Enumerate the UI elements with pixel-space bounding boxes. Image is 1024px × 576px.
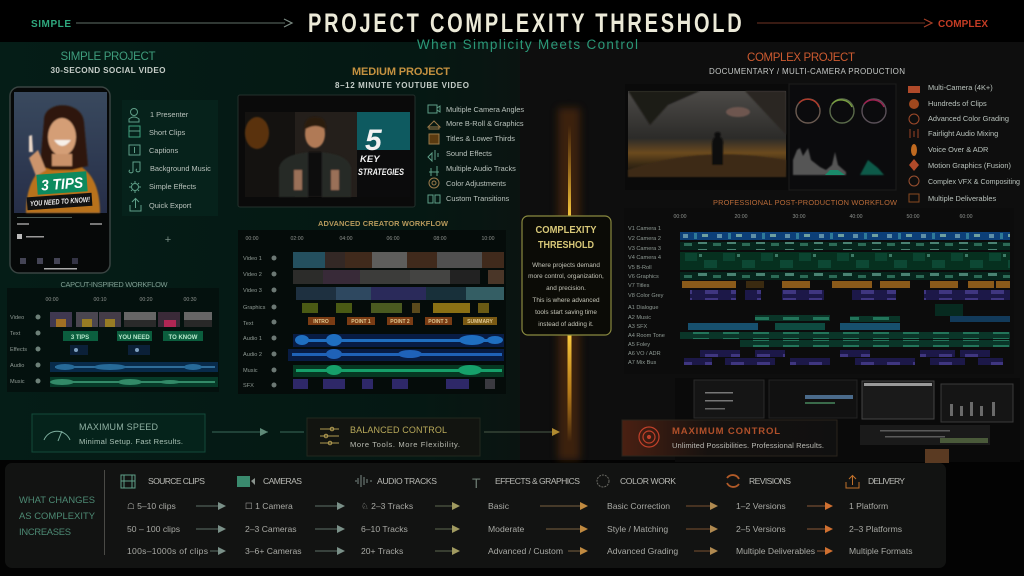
track: text clips: POINT 1: [351, 319, 371, 325]
phone mockup: [10, 87, 110, 273]
timeline: advanced creator workflow: 08:00: [434, 236, 447, 242]
timeline: capcut workflow: Audio: [10, 363, 24, 369]
feature list: complex: Complex VFX & Compositing: [928, 177, 1020, 186]
text clips: [63, 331, 203, 341]
callout: balanced control: BALANCED CONTROL: [350, 425, 447, 435]
track: music: [293, 365, 504, 377]
callout: complexity threshold: COMPLEXITY: [536, 225, 597, 236]
callout: complexity threshold: instead of adding it.: [538, 321, 594, 328]
timeline: post-production workflow: 50:00: [907, 214, 920, 220]
timeline: advanced creator workflow: 02:00: [291, 236, 304, 242]
timeline: post-production workflow: [624, 208, 1014, 374]
column: color work: Style / Matching: [607, 524, 668, 534]
arrow: speed to balanced: [212, 428, 304, 436]
track: text clips: POINT 2: [390, 319, 410, 325]
callout: complexity threshold: more control, organization,: [528, 273, 604, 280]
column: effects and graphics: Basic: [488, 501, 510, 511]
feature list: complex: Motion Graphics (Fusion): [928, 161, 1011, 170]
feature list: simple: Short Clips: [149, 128, 185, 137]
table row heading: WHAT CHANGES: [19, 494, 95, 505]
threshold beam: [558, 108, 580, 460]
timeline: capcut workflow: Text: [10, 331, 21, 337]
feature list: simple: 1 Presenter: [150, 110, 189, 119]
video title: 5 key strategies: STRATEGIES: [358, 167, 405, 178]
track: text clips: [308, 317, 497, 325]
video thumbnails: [50, 312, 212, 327]
timeline: capcut workflow: 00:00: [46, 297, 59, 303]
icon: effects: [129, 181, 141, 193]
icon: sliders: [320, 427, 339, 445]
track: text clips: INTRO: [313, 319, 329, 325]
timeline: post-production workflow: V7 Titles: [628, 283, 650, 289]
icon: captions: [129, 145, 140, 155]
feature list: simple: Background Music: [150, 164, 211, 173]
gauge: red wheel: [796, 99, 820, 123]
column: effects and graphics: Moderate: [488, 524, 525, 534]
column: revisions: Multiple Deliverables: [736, 546, 815, 556]
table row heading: INCREASES: [19, 526, 71, 537]
timeline: post-production workflow: V5 B-Roll: [628, 265, 652, 271]
feature list: simple: Simple Effects: [149, 182, 196, 191]
callout: complexity threshold: [522, 216, 611, 335]
icon: presenter: [129, 108, 139, 122]
column: delivery: Multiple Formats: [849, 546, 913, 556]
track: graphics: [302, 303, 489, 313]
color grading viewer: [625, 84, 789, 190]
timeline: post-production workflow: 20:00: [735, 214, 748, 220]
audio tracks: [680, 304, 1010, 365]
icon: export: [130, 198, 141, 211]
timeline: advanced creator workflow: Graphics: [243, 305, 266, 311]
timeline: post-production workflow: A6 VO / ADR: [628, 351, 661, 357]
column: cameras: [237, 476, 345, 556]
timeline: advanced creator workflow: Video 3: [243, 288, 262, 294]
timeline: advanced creator workflow: SFX: [243, 383, 254, 389]
icon: short clips: [129, 126, 140, 137]
track: video 1: [293, 252, 504, 268]
column: color work: Advanced Grading: [607, 546, 678, 556]
column: cameras: 3–6+ Cameras: [245, 546, 302, 556]
feature list: complex: Advanced Color Grading: [928, 114, 1009, 123]
video subtitle: YOU NEED TO KNOW!: [30, 195, 91, 208]
feature list: medium: Multiple Camera Angles: [446, 105, 524, 114]
column: source clips: 50 – 100 clips: [127, 524, 180, 534]
video tracks: [680, 232, 1010, 300]
arrow: balanced to maximum: [484, 428, 560, 436]
column: color work: COLOR WORK: [620, 476, 676, 486]
timeline: advanced creator workflow: Audio 1: [243, 336, 262, 342]
track: video 2: [293, 270, 504, 284]
heading: complex project: DOCUMENTARY / MULTI-CAMERA PRODUCTION: [709, 67, 905, 76]
callout: maximum control: [622, 420, 837, 456]
column: source clips: 100s–1000s of clips: [127, 546, 208, 556]
column: revisions: [727, 475, 833, 556]
timeline: post-production workflow: 30:00: [793, 214, 806, 220]
track: sfx: [293, 379, 495, 389]
feature list: medium: Multiple Audio Tracks: [446, 164, 516, 173]
table row heading: [19, 494, 96, 537]
column: cameras: 2–3 Cameras: [245, 524, 297, 534]
title: PROJECT COMPLEXITY THRESHOLD: [308, 8, 742, 39]
panel: simple project: [7, 51, 219, 392]
icon: music: [129, 162, 140, 173]
table row heading: AS COMPLEXITY: [19, 510, 96, 521]
scale label: simple: SIMPLE: [31, 19, 71, 30]
column: cameras: ☐ 1 Camera: [245, 501, 293, 511]
timeline: advanced creator workflow: Video 2: [243, 272, 262, 278]
feature list: medium: Titles & Lower Thirds: [446, 134, 515, 143]
timeline: advanced creator workflow: 04:00: [340, 236, 353, 242]
column: effects and graphics: T: [472, 475, 481, 491]
timeline: post-production workflow: A1 Dialogue: [628, 305, 658, 311]
column: effects and graphics: EFFECTS & GRAPHICS: [495, 476, 580, 486]
feature list: medium: Sound Effects: [446, 149, 492, 158]
heading: simple project: 30-SECOND SOCIAL VIDEO: [50, 66, 166, 75]
subtitle: When Simplicity Meets Control: [417, 37, 638, 52]
track: audio 2: [288, 349, 504, 361]
feature list: medium: Custom Transitions: [446, 194, 510, 203]
panel: medium project: [238, 66, 524, 394]
video title: 5 key strategies: KEY: [360, 154, 381, 165]
track: text clips: POINT 3: [428, 319, 448, 325]
panel: complex project: [624, 52, 1020, 463]
timeline: capcut workflow: 00:30: [184, 297, 197, 303]
timeline: advanced creator workflow: 10:00: [482, 236, 495, 242]
feature list: simple: Captions: [149, 146, 178, 155]
timeline: capcut workflow: Video: [10, 315, 24, 321]
scale label: complex: COMPLEX: [938, 19, 988, 30]
timeline: post-production workflow: V4 Camera 4: [628, 255, 661, 261]
timeline: advanced creator workflow: 00:00: [246, 236, 259, 242]
feature list: simple: [122, 100, 218, 216]
timeline: advanced creator workflow: Text: [243, 321, 254, 327]
callout: complexity threshold: tools start saving time: [535, 309, 597, 316]
callout: maximum speed: Minimal Setup. Fast Results.: [79, 437, 183, 446]
arrow: simple to title: [76, 19, 292, 27]
column: audio tracks: [355, 475, 460, 556]
feature list: complex: Multi-Camera (4K+): [928, 83, 993, 92]
timeline: advanced creator workflow: 06:00: [387, 236, 400, 242]
icon: speedometer: [44, 431, 70, 441]
timeline: capcut workflow: 00:20: [140, 297, 153, 303]
heading: simple project: [50, 51, 166, 75]
heading: medium project: [335, 66, 469, 90]
callout: maximum control: Unlimited Possibilities. Professional Results.: [672, 441, 824, 450]
panel: what changes table: [5, 463, 946, 568]
timeline: capcut workflow: Music: [10, 379, 25, 385]
icon: target: [639, 427, 659, 447]
track: audio 1: [293, 334, 504, 347]
text clips: YOU NEED: [118, 335, 150, 341]
feature list: medium: [428, 105, 524, 203]
effects markers: [70, 345, 150, 355]
feature list: complex: Fairlight Audio Mixing: [928, 129, 998, 138]
column: revisions: REVISIONS: [749, 476, 791, 486]
arrow: title to complex: [757, 19, 932, 27]
column: delivery: [846, 476, 913, 556]
edit suite monitors: [675, 378, 1020, 463]
column: delivery: 1 Platform: [849, 501, 888, 511]
heading: simple project: SIMPLE PROJECT: [60, 51, 156, 63]
column: revisions: 2–5 Versions: [736, 524, 786, 534]
workflow heading: post-production: PROFESSIONAL POST-PRODUCTION WORKFLOW: [713, 198, 897, 207]
timeline: post-production workflow: A3 SFX: [628, 324, 648, 330]
workflow heading: advanced creator: ADVANCED CREATOR WORKFLOW: [318, 219, 448, 228]
heading: complex project: COMPLEX PROJECT: [747, 52, 855, 64]
timeline: post-production workflow: A7 Mix Bus: [628, 360, 656, 366]
video title: 5 key strategies: 5: [365, 124, 383, 157]
timeline: post-production workflow: V1 Camera 1: [628, 226, 661, 232]
callout: balanced control: [307, 418, 480, 456]
video title: 3 tips: 3 TIPS: [41, 175, 84, 194]
audio track: [50, 362, 218, 372]
column: color work: [597, 475, 718, 556]
feature list: complex: [908, 83, 1020, 203]
callout: complexity threshold: and precision.: [546, 285, 586, 292]
callout: maximum speed: [32, 414, 205, 452]
timeline: post-production workflow: 60:00: [960, 214, 973, 220]
column: audio tracks: AUDIO TRACKS: [377, 476, 437, 486]
gauge: green wheel: [830, 99, 854, 123]
music track: [50, 377, 218, 387]
column: cameras: CAMERAS: [263, 476, 302, 486]
timeline: post-production workflow: V8 Color Grey: [628, 293, 664, 299]
column: source clips: SOURCE CLIPS: [148, 476, 205, 486]
column: audio tracks: ♘ 2–3 Tracks: [361, 501, 413, 511]
timeline: capcut workflow: Effects: [10, 347, 27, 353]
timeline: post-production workflow: 40:00: [850, 214, 863, 220]
text clips: TO KNOW: [169, 335, 198, 341]
gauge: magenta wheel: [862, 99, 886, 123]
video subtitle: [27, 193, 92, 210]
column: delivery: DELIVERY: [868, 476, 905, 486]
timeline: post-production workflow: A4 Room Tone: [628, 333, 665, 339]
timeline: post-production workflow: V6 Graphics: [628, 274, 659, 280]
feature list: medium: More B-Roll & Graphics: [446, 119, 524, 128]
column: audio tracks: 20+ Tracks: [361, 546, 403, 556]
column: source clips: ☖ 5–10 clips: [127, 501, 176, 511]
scopes panel: [789, 84, 896, 190]
column: color work: Basic Correction: [607, 501, 670, 511]
column: audio tracks: 6–10 Tracks: [361, 524, 408, 534]
timeline: post-production workflow: A2 Music: [628, 315, 651, 321]
track: text clips: SUMMARY: [467, 319, 493, 325]
column: effects and graphics: [472, 475, 588, 556]
callout: balanced control: More Tools. More Flexibility.: [350, 440, 460, 449]
callout: complexity threshold: THRESHOLD: [538, 240, 594, 251]
feature list: complex: Voice Over & ADR: [928, 145, 988, 154]
timeline: capcut workflow: 00:10: [94, 297, 107, 303]
column: source clips: [121, 475, 226, 556]
heading: medium project: MEDIUM PROJECT: [352, 66, 450, 78]
workflow heading: capcut: CAPCUT-INSPIRED WORKFLOW: [60, 280, 168, 289]
timeline: post-production workflow: 00:00: [674, 214, 687, 220]
timeline: advanced creator workflow: Video 1: [243, 256, 262, 262]
callout: maximum speed: MAXIMUM SPEED: [79, 422, 158, 432]
timeline: post-production workflow: V3 Camera 3: [628, 246, 661, 252]
feature list: simple: Quick Export: [149, 201, 191, 210]
column: delivery: 2–3 Platforms: [849, 524, 902, 534]
heading: medium project: 8–12 MINUTE YOUTUBE VIDEO: [335, 81, 469, 90]
feature list: complex: Multiple Deliverables: [928, 194, 996, 203]
timeline: advanced creator workflow: [238, 230, 506, 394]
column: effects and graphics: Advanced / Custom: [488, 546, 563, 556]
video title: 5 key strategies: [358, 124, 405, 178]
timeline: advanced creator workflow: Music: [243, 368, 258, 374]
text clips: 3 TIPS: [71, 335, 89, 341]
timeline: post-production workflow: V2 Camera 2: [628, 236, 661, 242]
track: video 3: [296, 287, 504, 300]
feature list: complex: Hundreds of Clips: [928, 99, 987, 108]
timeline: post-production workflow: A5 Foley: [628, 342, 650, 348]
callout: complexity threshold: This is where advanced: [532, 297, 600, 304]
timeline: capcut workflow: [7, 288, 219, 392]
timeline: advanced creator workflow: Audio 2: [243, 352, 262, 358]
plus sign: +: [165, 234, 171, 246]
editor window mockup: [238, 95, 415, 207]
column: revisions: 1–2 Versions: [736, 501, 786, 511]
callout: complexity threshold: Where projects demand: [532, 262, 600, 269]
callout: maximum control: MAXIMUM CONTROL: [672, 426, 780, 437]
histogram: [793, 148, 846, 175]
heading: complex project: [709, 52, 905, 76]
feature list: medium: Color Adjustments: [446, 179, 506, 188]
